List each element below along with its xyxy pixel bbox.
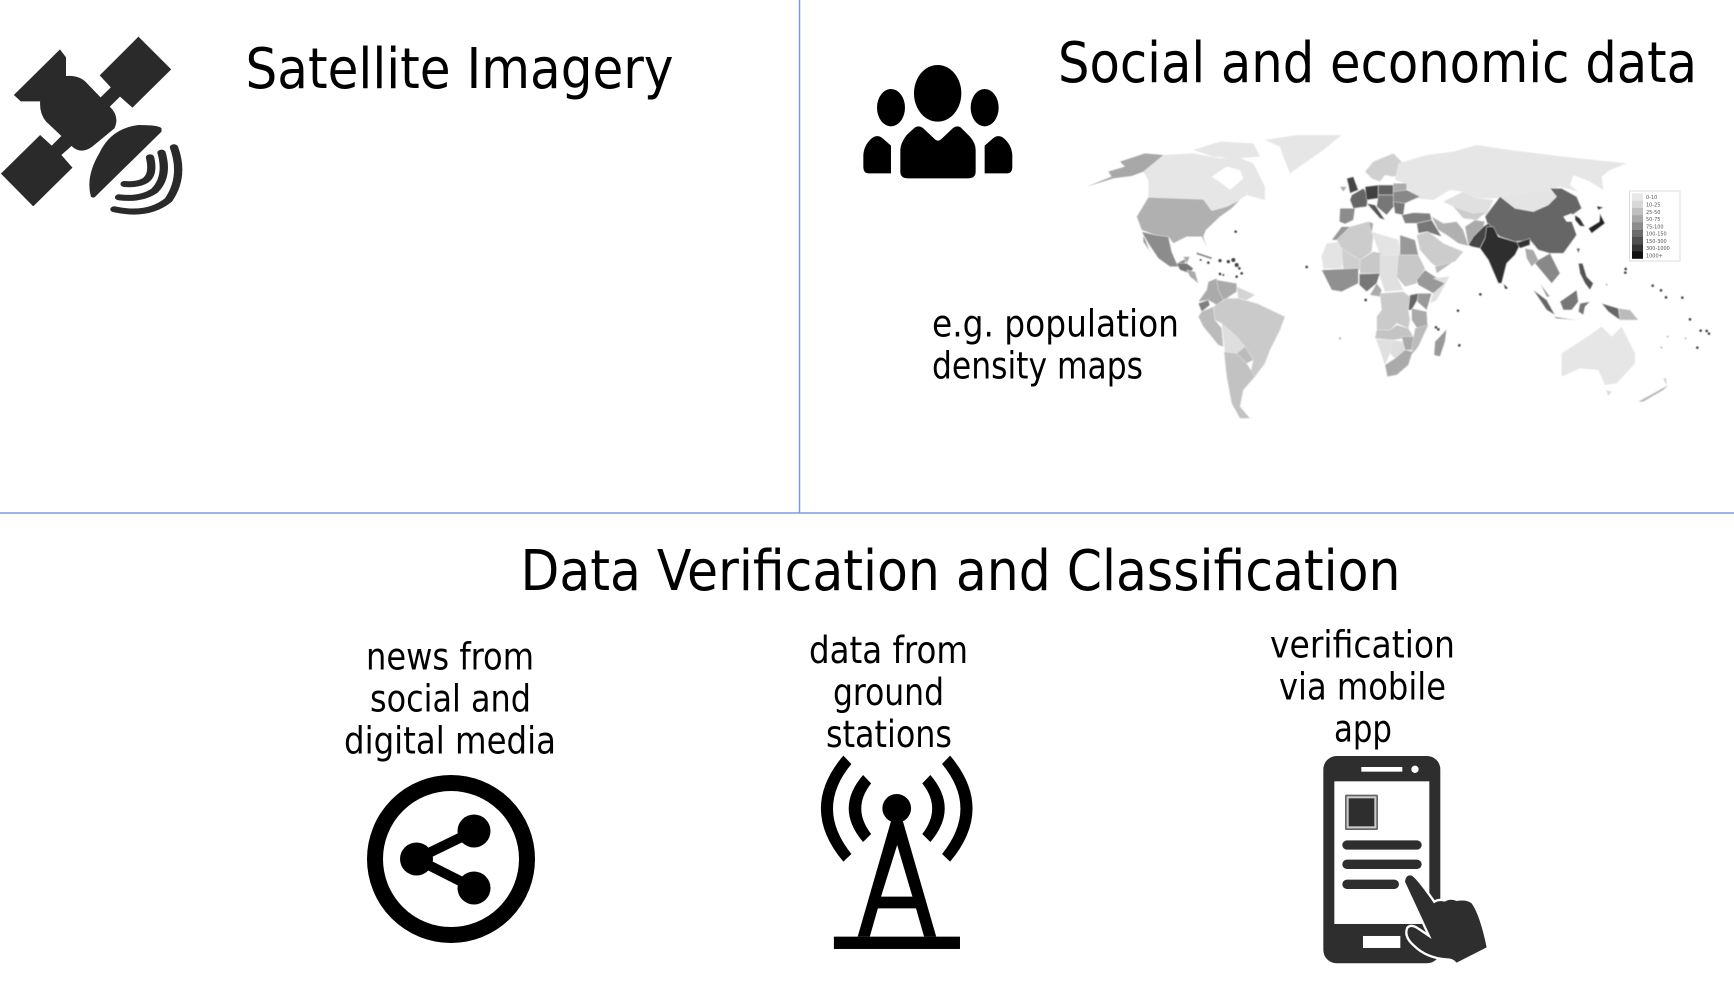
legend: density scale: 100-150 [1646,232,1667,238]
text: verification via mobile app: verification [1270,624,1455,666]
heading: satellite imagery: Satellite Imagery [246,37,674,102]
text: news from social and digital media [344,636,556,762]
text: data from ground stations: ground [833,671,944,714]
legend: density scale: 25-50 [1646,210,1660,216]
heading: data verification and classification: Data Verification and Classification [520,539,1400,604]
text: population density example [932,302,1179,388]
text: verification via mobile app: via mobile [1279,666,1446,708]
icon: group of people [863,65,1012,178]
panel: social and economic data [863,31,1710,418]
text: verification via mobile app [1270,624,1455,750]
icon: satellite [1,37,178,212]
legend: density scale: 300-1000 [1646,246,1670,252]
text: population density example: e.g. population [932,302,1179,346]
text: population density example: density maps [932,344,1143,388]
icon: radio tower [821,756,973,949]
legend: density scale: 150-300 [1646,239,1667,245]
text: news from social and digital media: news from [366,636,534,678]
legend: density scale: 10-25 [1646,202,1660,208]
text: data from ground stations: data from [809,629,968,672]
legend: density scale: 1000+ [1646,253,1663,259]
chart: world population density map [1087,135,1710,418]
legend: density scale: 75-100 [1646,224,1664,230]
text: news from social and digital media: social and [370,678,531,720]
text: verification via mobile app: app [1334,708,1392,750]
icon: mobile phone with pointing hand [1323,756,1487,963]
panel: data verification and classification [344,539,1487,963]
legend: density scale: 0-10 [1646,195,1657,201]
icon: share symbol in circle [375,783,527,935]
heading: social and economic data: Social and economic data [1058,31,1697,96]
legend: density scale: 50-75 [1646,217,1660,223]
legend: density scale [1630,191,1680,261]
panel: satellite imagery [1,37,674,212]
text: news from social and digital media: digital media [344,720,556,762]
text: data from ground stations [809,629,968,756]
text: data from ground stations: stations [826,713,952,756]
